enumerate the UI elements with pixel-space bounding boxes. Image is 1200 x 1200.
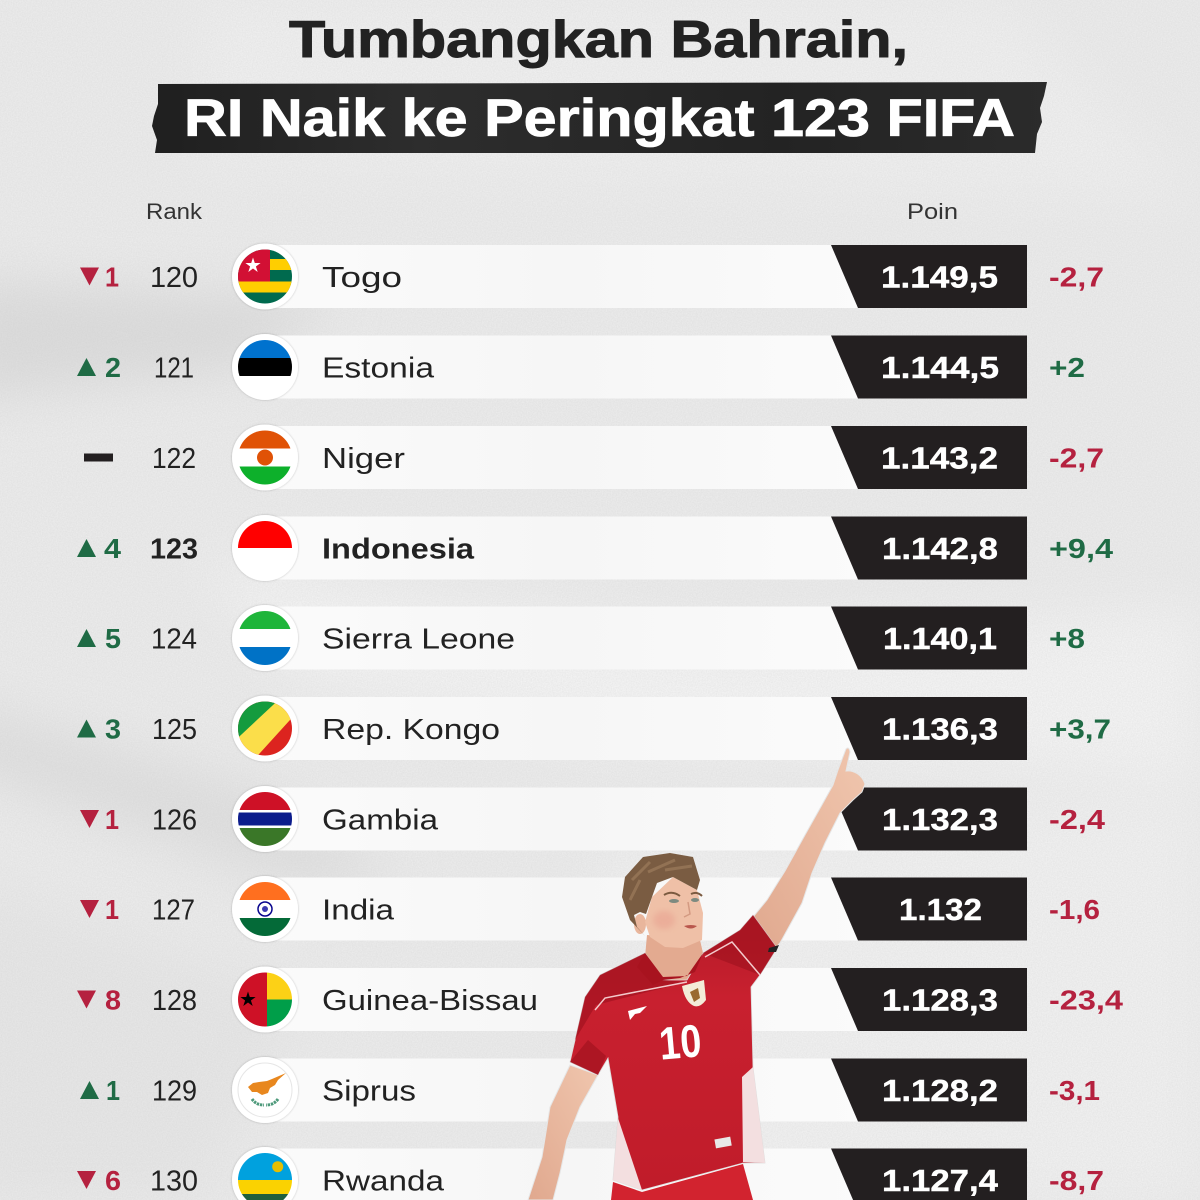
row: Siprus: 1.128,2	[882, 1073, 998, 1108]
row: Gambia: 1.132,3	[882, 802, 998, 837]
jersey tag	[714, 1137, 732, 1148]
neck	[645, 935, 703, 980]
red jersey	[570, 915, 777, 1190]
row: Siprus	[80, 1057, 1100, 1123]
face details	[653, 893, 702, 929]
row: Rep. Kongo: +3,7	[1049, 714, 1111, 744]
row: Guinea-Bissau: 8	[105, 984, 121, 1016]
row: Togo: 1	[105, 262, 119, 292]
row: Rwanda	[77, 1147, 1104, 1200]
row: Niger: 1.143,2	[881, 440, 998, 476]
row: Guinea-Bissau: 128	[152, 985, 197, 1017]
row: Indonesia	[77, 515, 1113, 581]
flag: Niger	[232, 424, 298, 490]
flag: Cyprus	[232, 1057, 298, 1123]
row: Sierra Leone: 5	[105, 623, 121, 654]
row: Sierra Leone: +8	[1049, 623, 1085, 654]
row: Rep. Kongo: Rep. Kongo	[322, 714, 500, 746]
row: Rwanda: Rwanda	[322, 1166, 445, 1198]
row: Gambia: 1	[105, 804, 119, 835]
flag: Rwanda	[232, 1147, 298, 1200]
row: Indonesia: +9,4	[1049, 533, 1113, 564]
title banner	[152, 82, 1047, 153]
row: Guinea-Bissau	[77, 966, 1123, 1032]
raised arm and hand	[753, 748, 865, 960]
face	[645, 877, 703, 948]
row: Sierra Leone	[77, 605, 1085, 671]
flag: Gambia	[232, 786, 298, 852]
row: Rep. Kongo: 125	[152, 714, 197, 746]
row: Niger	[84, 424, 1104, 490]
jersey brand logo	[628, 1006, 647, 1020]
row: India: 127	[152, 894, 195, 926]
row: Sierra Leone: 1.140,1	[883, 621, 997, 656]
flag: Indonesia	[232, 515, 298, 581]
row: Gambia	[80, 786, 1105, 852]
row: Estonia: 2	[105, 352, 121, 383]
row: Niger: -2,7	[1049, 442, 1104, 474]
row: Guinea-Bissau: -23,4	[1049, 984, 1123, 1016]
collar	[637, 953, 703, 985]
ear	[634, 914, 646, 934]
row: Togo	[80, 244, 1104, 310]
hair highlights	[630, 860, 692, 900]
row: Togo: 120	[150, 262, 198, 294]
row: Gambia: -2,4	[1049, 804, 1105, 835]
row: Siprus: -3,1	[1049, 1075, 1100, 1106]
flag: Republic of Congo	[232, 696, 298, 762]
row: Togo: 1.149,5	[881, 260, 998, 294]
armband	[768, 945, 779, 952]
row: Siprus: Siprus	[322, 1076, 416, 1108]
row: Rep. Kongo: 1.136,3	[882, 712, 998, 746]
row: Togo: -2,7	[1049, 262, 1104, 292]
row: India: -1,6	[1049, 894, 1100, 925]
flag: Estonia	[232, 334, 298, 400]
row: Rwanda: 130	[150, 1166, 198, 1198]
row: Siprus: 1	[106, 1075, 120, 1106]
player illustration	[528, 748, 865, 1200]
row: Indonesia: 123	[150, 534, 198, 566]
banner heading: RI Naik ke Peringkat 123 FIFA	[184, 89, 1015, 148]
row: Guinea-Bissau: 1.128,3	[882, 982, 998, 1018]
row: Indonesia: Indonesia	[322, 534, 475, 566]
row: Guinea-Bissau: Guinea-Bissau	[322, 985, 538, 1017]
row: India	[80, 876, 1100, 942]
lowered arm	[528, 1065, 598, 1200]
crest	[682, 980, 706, 1006]
jersey number: 10	[657, 1014, 703, 1070]
row: Rwanda: 1.127,4	[882, 1163, 999, 1198]
row: Rwanda: -8,7	[1049, 1165, 1104, 1196]
row: Niger: Niger	[322, 443, 405, 475]
dark shoulder shading	[570, 915, 777, 1075]
row: Siprus: 129	[152, 1076, 197, 1108]
row: India: 1	[105, 894, 119, 925]
jersey piping	[595, 942, 760, 1010]
title: Tumbangkan Bahrain,	[289, 11, 908, 69]
column header: rank: Rank	[146, 199, 203, 224]
row: Indonesia: 1.142,8	[882, 531, 998, 566]
row: Gambia: 126	[152, 804, 197, 836]
row: Estonia: Estonia	[322, 352, 435, 384]
row: Estonia: 121	[154, 352, 194, 384]
row: Indonesia: 4	[104, 533, 121, 564]
flag: India	[232, 876, 298, 942]
flag: Guinea-Bissau	[232, 966, 298, 1032]
hair	[622, 853, 700, 936]
row: Togo: Togo	[322, 262, 402, 294]
row: Rep. Kongo: 3	[105, 714, 121, 744]
flag: Togo	[232, 244, 298, 310]
row: Estonia: +2	[1049, 352, 1085, 383]
row: Rwanda: 6	[105, 1165, 121, 1196]
row: Gambia: Gambia	[322, 804, 439, 836]
row: Rep. Kongo	[77, 696, 1111, 762]
shorts	[611, 1164, 753, 1200]
flag: Sierra Leone	[232, 605, 298, 671]
row: Niger: 122	[152, 443, 196, 475]
row: Sierra Leone: Sierra Leone	[322, 624, 515, 656]
row: Estonia: 1.144,5	[881, 350, 999, 385]
row: India: India	[322, 894, 395, 926]
row: Sierra Leone: 124	[151, 624, 197, 656]
row: India: 1.132	[899, 892, 982, 927]
row: Estonia	[77, 334, 1085, 400]
white jersey side panels	[613, 1067, 765, 1190]
column header: points: Poin	[907, 199, 958, 224]
